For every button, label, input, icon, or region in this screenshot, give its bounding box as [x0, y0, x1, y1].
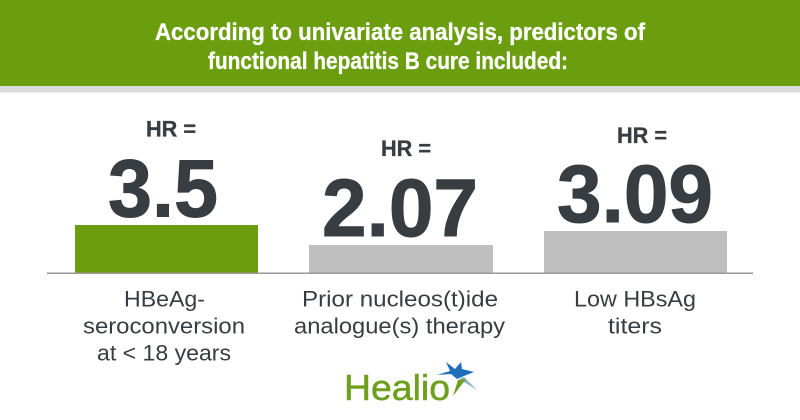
title [155, 19, 646, 75]
label: Low HBsAg titers [574, 286, 696, 338]
value: HR 3.5: 3.5 [108, 144, 218, 234]
value: HR 2.07: 2.07 [322, 163, 478, 254]
label: Prior nucleos(t)ide analogue(s) therapy: Prior nucleos(t)ide [302, 286, 498, 312]
value: HR 2.07: HR = [381, 136, 431, 161]
label: HBeAg-seroconversion at < 18 years [83, 286, 245, 366]
label: HBeAg-seroconversion at < 18 years: seroconversion [83, 314, 245, 338]
logo: Healio: Healio [344, 367, 450, 408]
value: HR 3.5: HR = [146, 116, 196, 142]
value: HR 3.09: HR = [617, 123, 667, 148]
bar: prior therapy [309, 245, 493, 273]
label: Low HBsAg titers: Low HBsAg [574, 286, 696, 312]
header band [0, 0, 800, 86]
bar: HBeAg-seroconversion [75, 225, 258, 273]
bar chart [47, 225, 753, 274]
title: According to univariate analysis, predictors of [155, 19, 646, 46]
label: HBeAg-seroconversion at < 18 years: at < 18 years [97, 340, 231, 366]
axis line [47, 272, 753, 274]
title: functional hepatitis B cure included: [208, 48, 568, 75]
label: Prior nucleos(t)ide analogue(s) therapy: analogue(s) therapy [294, 314, 505, 338]
label: Low HBsAg titers: titers [608, 314, 662, 338]
bar: low HBsAg titers [544, 231, 727, 273]
label: HBeAg-seroconversion at < 18 years: HBeAg- [124, 286, 205, 312]
label: Prior nucleos(t)ide analogue(s) therapy [294, 286, 505, 338]
logo: Healio [344, 362, 477, 408]
icon: star [437, 362, 477, 396]
value: HR 3.09: 3.09 [557, 149, 713, 240]
